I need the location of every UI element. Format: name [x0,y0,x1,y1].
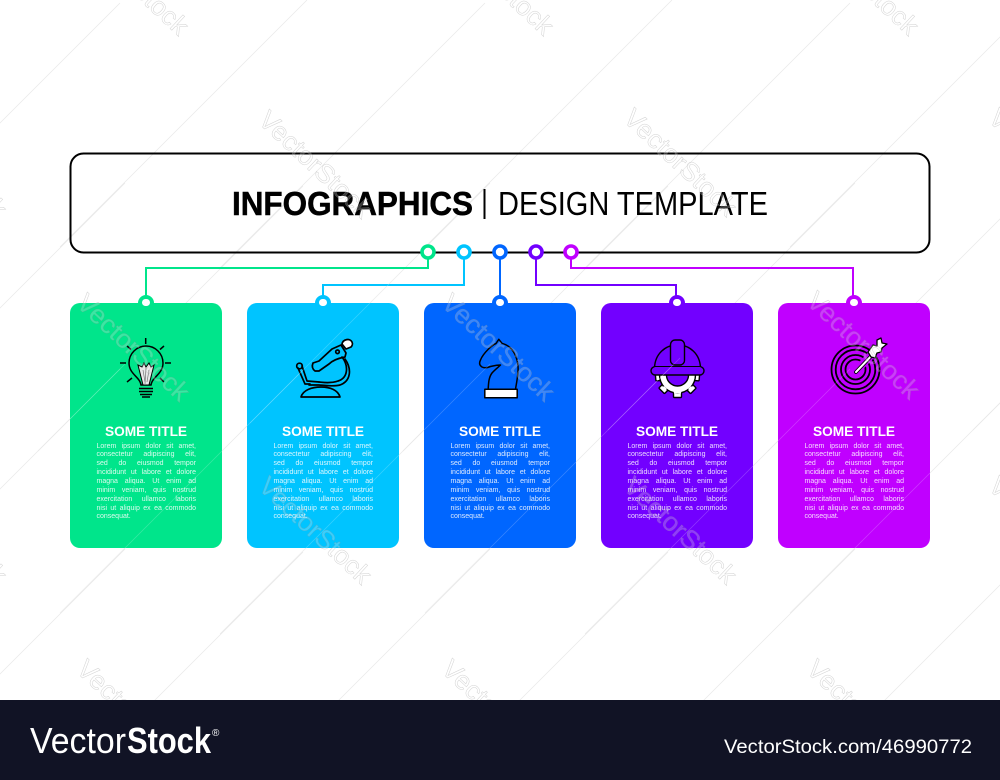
card body text: consectetur adipiscing elit, [274,451,373,458]
card body text: incididunt ut labore et dolore [96,469,196,476]
card body text: sed do eiusmod tempor [628,460,727,467]
card title: SOME TITLE [636,424,718,439]
footer logo: Vector [30,720,126,761]
card body text: Lorem ipsum dolor sit amet, [804,442,904,450]
card body text: consectetur adipiscing elit, [804,451,904,458]
panel: card 3 blue [424,302,576,548]
card title: SOME TITLE [282,424,364,439]
card body text: nisi ut aliquip ex ea commodo [96,505,196,512]
node: cyan [458,246,470,258]
watermark overlay: VectorStock [71,653,197,774]
connector: blue [499,252,501,302]
footer logo: Stock [127,720,212,761]
connector: green [146,252,428,302]
card body text: exercitation ullamco laboris [96,496,196,503]
icon: light bulb [120,338,171,398]
icon: microscope [296,338,354,398]
title: design template: DESIGN TEMPLATE [498,185,768,222]
card body text: sed do eiusmod tempor [274,460,373,467]
panel: card 5 magenta [778,302,930,548]
card body text: minim veniam, quis nostrud [96,487,196,494]
card body text: minim veniam, quis nostrud [274,487,373,494]
watermark overlay: VectorStock [253,470,379,591]
card body text: incididunt ut labore et dolore [628,469,727,476]
panel: card 2 cyan [247,302,399,548]
watermark overlay: VectorStock [618,470,744,591]
node: magenta [565,246,577,258]
watermark overlay: VectorStock [618,102,744,223]
card body text: sed do eiusmod tempor [96,460,196,467]
card body text [450,442,550,520]
card title: SOME TITLE [459,424,541,439]
watermark overlay: VectorStock [436,287,562,408]
card body text: exercitation ullamco laboris [628,496,727,503]
connector: magenta [571,252,853,302]
card body text: magna aliqua. Ut enim ad [96,478,196,485]
watermark overlay: VectorStock [253,104,379,225]
watermark overlay: VectorStock [801,653,927,774]
card body text: Lorem ipsum dolor sit amet, [628,442,727,450]
watermark overlay: VectorStock [801,285,927,406]
card body text [274,442,373,520]
card body text: consequat. [628,513,662,520]
connector: cyan [323,252,464,302]
node: blue [494,246,506,258]
icon: target and arrow [830,337,888,394]
card body text: exercitation ullamco laboris [450,496,550,503]
footer logo: ® [212,728,220,739]
card body text [628,442,727,520]
card title: SOME TITLE [813,424,895,439]
card body text: consequat. [804,513,839,520]
title separator [484,189,486,219]
card body text: minim veniam, quis nostrud [450,487,550,494]
card body text: nisi ut aliquip ex ea commodo [804,505,904,512]
card body text: Lorem ipsum dolor sit amet, [450,442,550,450]
card body text: incididunt ut labore et dolore [450,469,550,476]
card body text: sed do eiusmod tempor [450,460,550,467]
card body text: consectetur adipiscing elit, [450,451,550,458]
panel: card 1 green [70,302,222,548]
footer logo [30,720,220,761]
card body text: nisi ut aliquip ex ea commodo [274,505,373,512]
icon: helmet and gear [650,339,705,398]
card body text: sed do eiusmod tempor [804,460,904,467]
card body text: consectetur adipiscing elit, [96,451,196,458]
card body text: exercitation ullamco laboris [804,496,904,503]
card body text: nisi ut aliquip ex ea commodo [450,505,550,512]
panel: card 4 violet [601,302,753,548]
watermark overlay: VectorStock [71,287,197,408]
card body text [804,442,904,520]
title: infographics: INFOGRAPHICS [232,185,473,222]
card body text: incididunt ut labore et dolore [804,469,904,476]
card body text: Lorem ipsum dolor sit amet, [274,442,373,450]
card body text: magna aliqua. Ut enim ad [628,478,727,485]
card body text: minim veniam, quis nostrud [628,487,727,494]
node: green [422,246,434,258]
footer band [0,700,1000,780]
card body text: magna aliqua. Ut enim ad [450,478,550,485]
footer image id: VectorStock.com/46990772 [724,737,972,758]
card body text: magna aliqua. Ut enim ad [274,478,373,485]
card body text: magna aliqua. Ut enim ad [804,478,904,485]
card body text: exercitation ullamco laboris [274,496,373,503]
node: violet [530,246,542,258]
card body text: minim veniam, quis nostrud [804,487,904,494]
card body text: consectetur adipiscing elit, [628,451,727,458]
card body text: consequat. [450,513,485,520]
connector: violet [536,252,676,302]
card body text: consequat. [274,513,308,520]
icon: chess knight [478,338,519,398]
card body text: consequat. [96,513,131,520]
card title: SOME TITLE [105,424,187,439]
card body text: Lorem ipsum dolor sit amet, [96,442,196,450]
card body text: incididunt ut labore et dolore [274,469,373,476]
card body text: nisi ut aliquip ex ea commodo [628,505,727,512]
watermark overlay: VectorStock [436,653,562,774]
card body text [96,442,196,520]
